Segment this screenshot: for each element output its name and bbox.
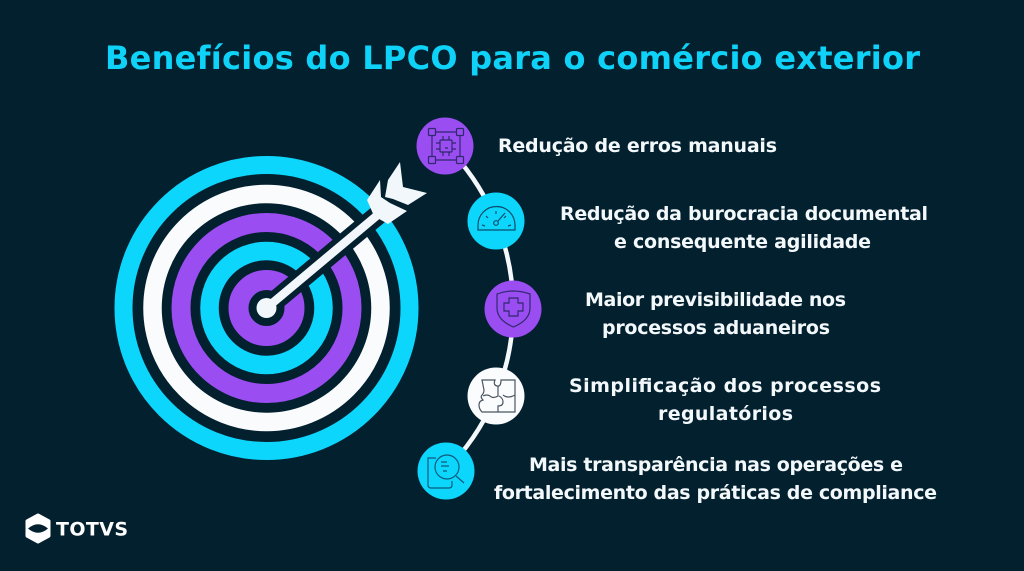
- arrow fletching: [367, 162, 427, 224]
- icon: shield: [484, 280, 542, 338]
- text: item 4: [569, 375, 881, 425]
- text: item 2: [560, 203, 928, 253]
- text: item 4: regulatórios: [658, 403, 793, 425]
- text: item 3: processos aduaneiros: [602, 317, 830, 339]
- connecting arc: [445, 145, 513, 471]
- text: item 5: Mais transparência nas operações e: [529, 454, 903, 476]
- icon: chip: [416, 118, 474, 174]
- icon: puzzle: [468, 368, 524, 424]
- logo: TOTVS: [27, 515, 128, 542]
- text: item 3: [585, 289, 846, 339]
- text: item 4: Simplificação dos processos: [569, 375, 881, 397]
- text: item 5: fortalecimento das práticas de compliance: [494, 482, 937, 504]
- text: item 2: Redução da burocracia documental: [560, 203, 928, 225]
- text: item 3: Maior previsibilidade nos: [585, 289, 846, 311]
- text: item 2: e consequente agilidade: [614, 231, 871, 253]
- icon: document with magnifier: [418, 442, 474, 500]
- text: item 5: [494, 454, 937, 504]
- text: item 1: Redução de erros manuais: [498, 135, 777, 157]
- logo: TOTVS: TOTVS: [56, 518, 128, 540]
- title: Benefícios do LPCO para o comércio exterior: [105, 39, 920, 77]
- icon: speedometer: [468, 192, 524, 250]
- target with arrow: [124, 162, 427, 451]
